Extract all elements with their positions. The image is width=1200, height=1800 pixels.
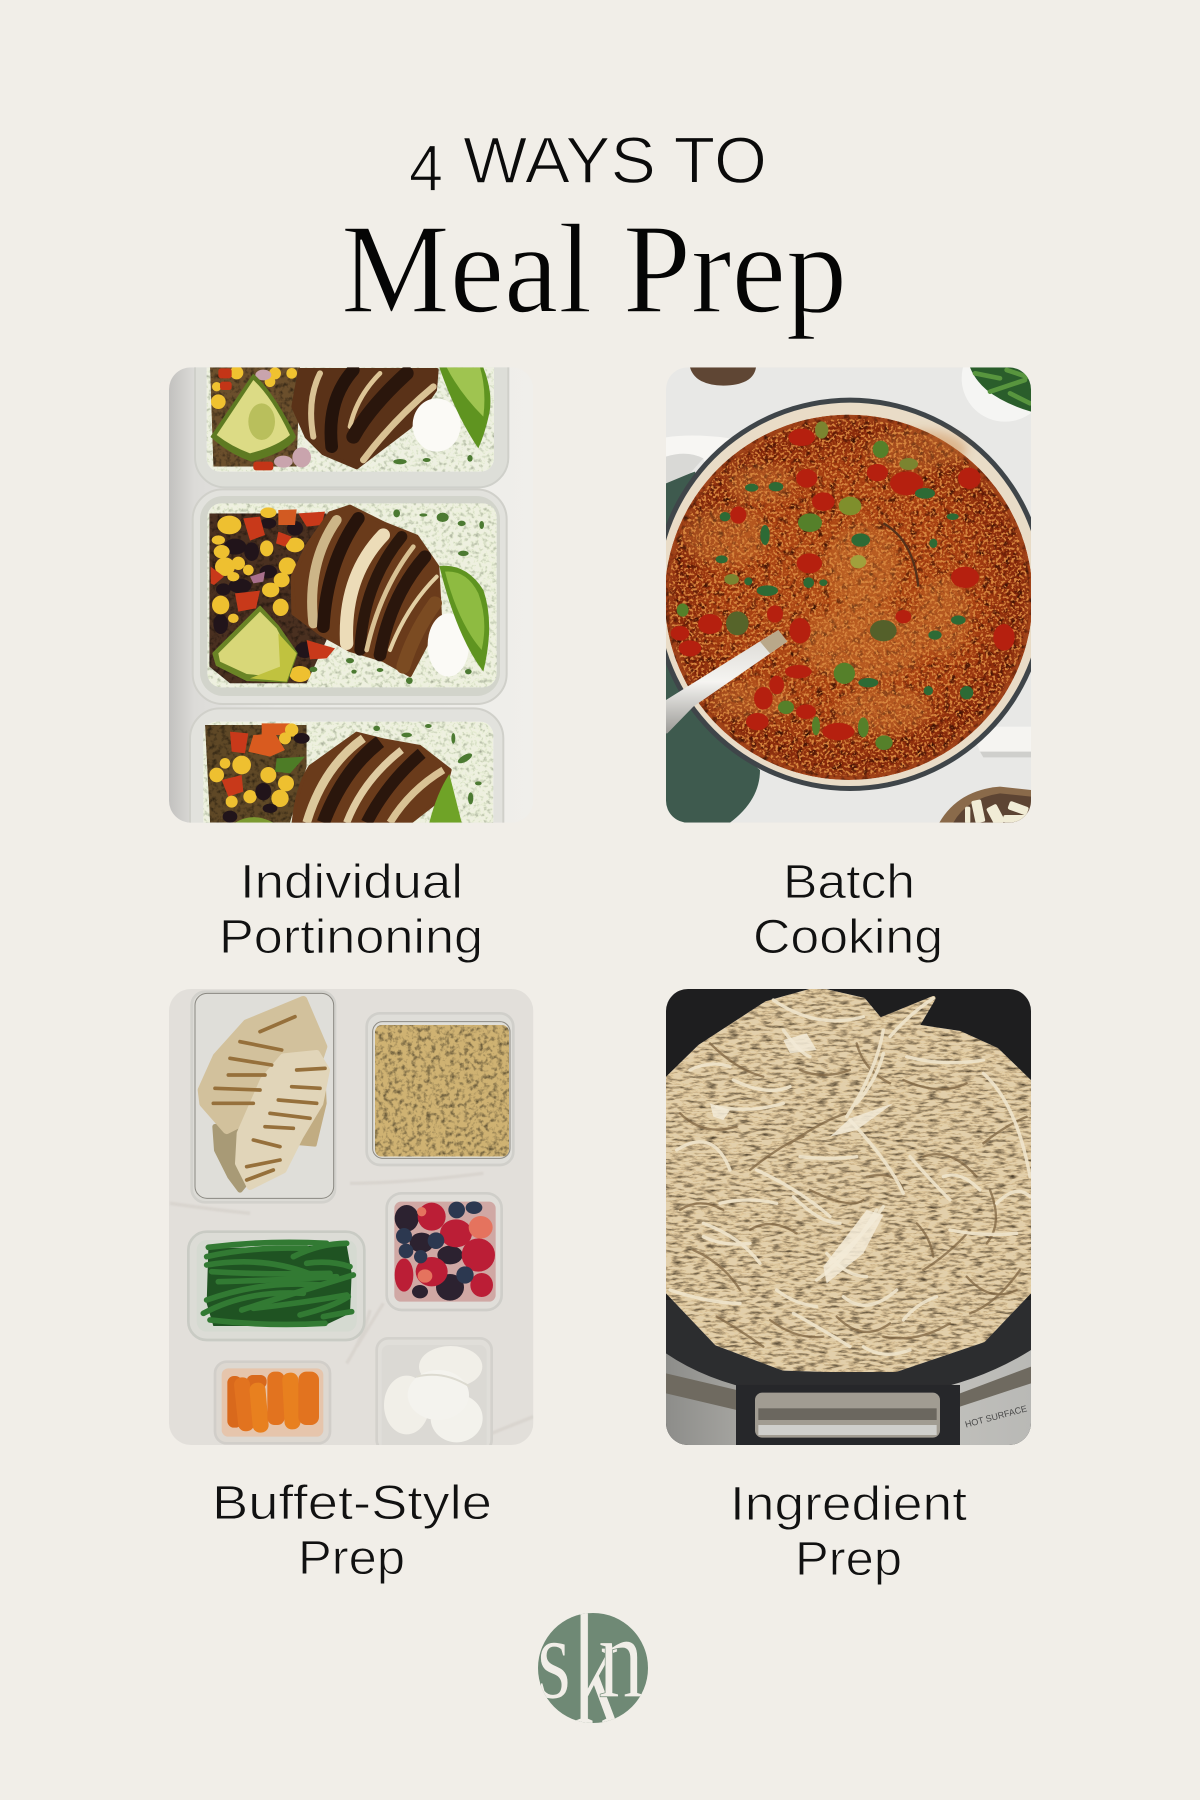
label: batch cooking (753, 856, 943, 964)
label: individual portioning (219, 856, 483, 964)
carrots container (215, 1362, 330, 1443)
light rice patches (683, 430, 970, 733)
label: ingredient prep (730, 1478, 967, 1586)
submerged ladle bowl (883, 523, 918, 587)
title (341, 123, 847, 340)
black handle (736, 1385, 960, 1445)
label: individual portioning: Individual (240, 856, 463, 909)
label: batch cooking: Cooking (753, 911, 943, 964)
black beans, corn and peppers (211, 507, 335, 682)
title line: meal prep: Meal Prep (341, 198, 847, 340)
panel: buffet-style prep photo (169, 989, 533, 1452)
green pepper pieces (677, 421, 918, 750)
label: ingredient prep: Ingredient (730, 1478, 967, 1531)
infographic canvas (169, 138, 1031, 1723)
pot with soup (653, 398, 1047, 791)
logo: skn monogram: s (537, 1593, 571, 1724)
pressure cooker silver base (666, 1350, 1031, 1445)
ladle handle (666, 630, 787, 733)
label: batch cooking: Batch (783, 856, 915, 909)
rice specks (669, 419, 1029, 776)
green towel (666, 472, 760, 823)
label: ingredient prep: Prep (795, 1533, 902, 1586)
cilantro flecks on rice (309, 509, 484, 684)
glass jar at top (690, 367, 756, 386)
title line: 4 ways to: WAYS TO (463, 123, 767, 197)
label: buffet-style prep: Buffet-Style (212, 1477, 492, 1530)
dark crevices (680, 1043, 1027, 1347)
light shreds (670, 998, 1030, 1354)
label: individual portioning: Portinoning (219, 911, 483, 964)
pot handles (666, 436, 1031, 757)
logo: skn monogram: n (598, 1592, 644, 1723)
label: buffet-style prep (212, 1477, 492, 1585)
sour cream and lime (428, 566, 489, 677)
berries container (387, 1193, 502, 1310)
red pepper pieces (671, 429, 1015, 740)
herb flecks (716, 482, 973, 699)
hot surface label: HOT SURFACE (964, 1403, 1028, 1430)
container: top meal prep box (194, 367, 510, 488)
logo: skn monogram (537, 1577, 648, 1760)
rice container (367, 1013, 513, 1165)
avocado (213, 607, 297, 682)
herb bowl (962, 367, 1031, 422)
cheese bowl (939, 787, 1031, 826)
panel: individual portioning photo (169, 367, 510, 823)
chicken breast slices (293, 507, 440, 675)
container: bottom meal prep box (189, 708, 504, 823)
eggs container (377, 1338, 492, 1452)
green beans container (188, 1232, 364, 1340)
pale pull of meat (710, 1033, 893, 1283)
shredded chicken mass (666, 989, 1031, 1372)
panel: batch cooking photo (666, 367, 1031, 823)
panel: ingredient prep photo (666, 989, 1031, 1445)
title line: 4 ways to: 4 (409, 131, 443, 205)
container: middle meal prep box (193, 489, 507, 704)
logo: skn monogram: k (572, 1577, 620, 1760)
chicken container (192, 992, 335, 1202)
label: buffet-style prep: Prep (298, 1532, 405, 1585)
inner pot rim (666, 1300, 1031, 1386)
